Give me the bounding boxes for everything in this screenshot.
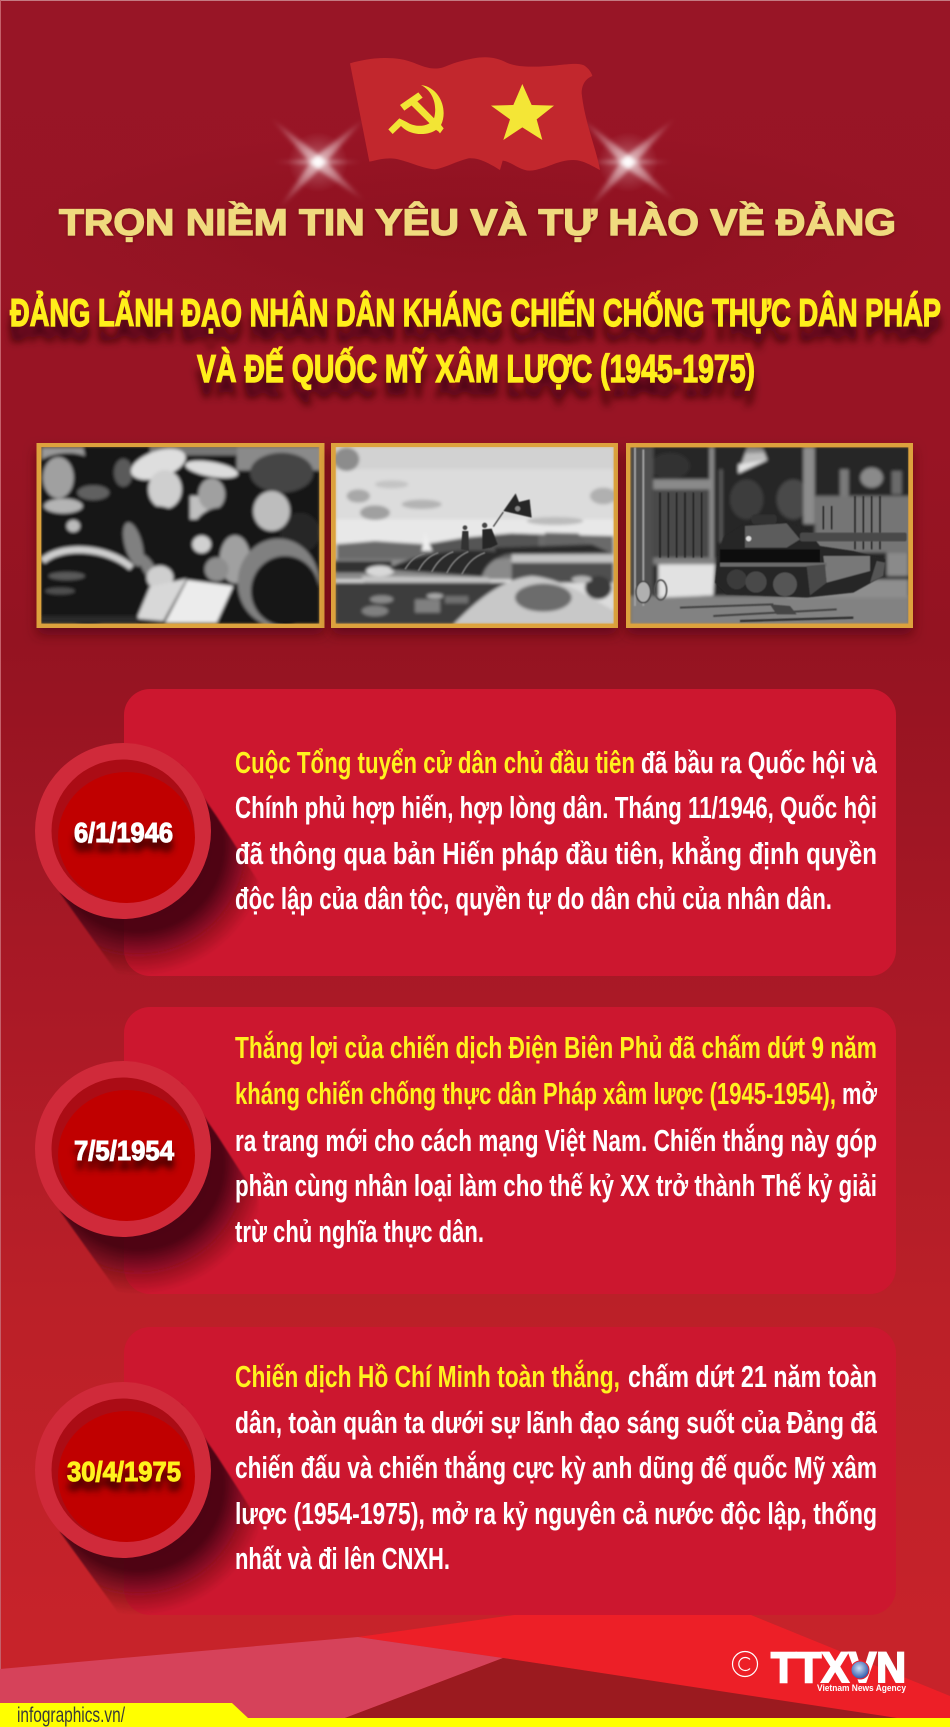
text block 1975: chấm dứt 21 năm toàn [628, 1359, 877, 1394]
icon: hammer and sickle [388, 85, 444, 134]
photo: voters at ballot [36, 443, 324, 628]
panel: 1954 [35, 1007, 896, 1295]
card background 1975 [124, 1327, 896, 1615]
icon: lens flare right [576, 113, 680, 213]
icon: globe [851, 1661, 869, 1679]
icon: party and national flag [350, 57, 600, 171]
subtitle: VÀ ĐẾ QUỐC MỸ XÂM LƯỢC (1945-1975) [197, 346, 755, 391]
date circle 1954 [35, 1061, 211, 1237]
text block 1954: mở [842, 1076, 878, 1111]
logo: TTXVN Vietnam News Agency: TTXVN [771, 1644, 906, 1692]
photo: Dien Bien Phu flag [331, 443, 618, 628]
icon: yellow star [491, 84, 554, 140]
photo: tank at palace gate [626, 443, 913, 628]
footer url: infographics.vn/ [17, 1704, 125, 1727]
date circle 1975: 30/4/1975 [67, 1456, 181, 1487]
date circle 1946: 6/1/1946 [74, 817, 173, 848]
title: TRỌN NIỀM TIN YÊU VÀ TỰ HÀO VỀ ĐẢNG [59, 201, 896, 243]
date circle 1946 [35, 743, 211, 919]
panel: 1946 [35, 689, 896, 977]
date circle 1975 [35, 1382, 211, 1558]
subtitle [10, 290, 941, 391]
text block 1954: trừ chủ nghĩa thực dân. [235, 1214, 484, 1249]
text block 1975: nhất và đi lên CNXH. [235, 1541, 450, 1576]
long shadow 1946 [60, 765, 258, 977]
icon: copyright [732, 1652, 758, 1676]
date circle 1954: 7/5/1954 [74, 1135, 174, 1166]
long shadow 1954 [60, 1083, 258, 1295]
text block 1975: Chiến dịch Hồ Chí Minh toàn thắng, [235, 1358, 620, 1394]
text block 1946: Cuộc Tổng tuyển cử dân chủ đầu tiên [235, 745, 635, 780]
text block 1975 [235, 1358, 878, 1576]
card background 1954 [124, 1007, 896, 1294]
card background 1946 [124, 689, 896, 976]
long shadow 1975 [60, 1404, 258, 1615]
bottom decoration [0, 1600, 950, 1727]
text block 1946 [235, 745, 878, 916]
panel: 1975 [35, 1327, 896, 1615]
icon: lens flare left [266, 113, 370, 213]
logo: TTXVN Vietnam News Agency: Vietnam News Agency [817, 1683, 907, 1694]
text block 1954 [235, 1029, 878, 1249]
